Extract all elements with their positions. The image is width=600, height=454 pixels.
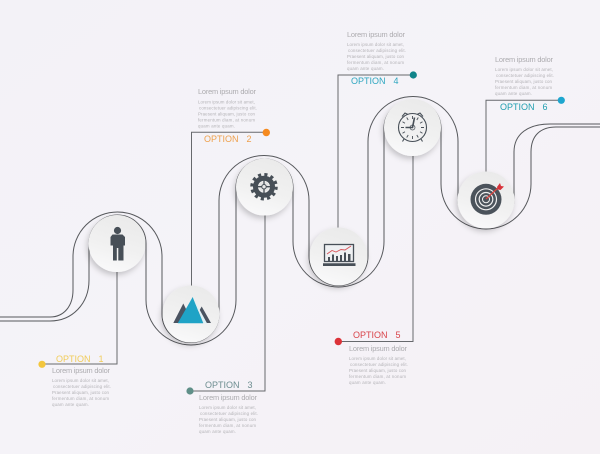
text block: option 1: Lorem ipsum dolor: [52, 366, 111, 375]
icon: laptop chart: [323, 244, 356, 266]
text block: option 6: [495, 55, 554, 96]
text block: option 4: consectetuer adipiscing elit.: [348, 48, 406, 53]
label: option 5: OPTION: [353, 330, 388, 340]
text block: option 5: quam ante quam.: [349, 380, 386, 385]
leader line and dot: option 1: [38, 270, 117, 368]
text block: option 5: [349, 344, 408, 385]
label: option 1: OPTION: [56, 354, 91, 364]
text block: option 3: quam ante quam.: [199, 429, 236, 434]
circle: option 6: [458, 172, 514, 228]
text block: option 2: fermentum diam, at nonum: [198, 118, 255, 122]
text block: option 1: fermentum diam, at nonum: [52, 396, 109, 401]
text block: option 6: quam ante quam.: [495, 91, 532, 96]
circle: option 2: [162, 286, 220, 342]
leader line and dot: option 5: [335, 155, 413, 345]
icon: person: [110, 227, 125, 260]
text block: option 6: consectetuer adipiscing elit.: [496, 73, 554, 78]
text block: option 6: Lorem ipsum dolor: [495, 55, 554, 64]
text block: option 4: fermentum diam, at nonum: [347, 60, 404, 65]
text block: option 5: Lorem ipsum dolor sit amet,: [349, 356, 406, 361]
text block: option 1: [52, 366, 111, 407]
text block: option 2: quam ante quam.: [198, 124, 235, 128]
text block: option 4: Lorem ipsum dolor sit amet,: [347, 42, 404, 47]
icon: target with arrow: [470, 183, 504, 215]
label: option 5: 5: [396, 330, 401, 340]
text block: option 4: [347, 30, 406, 71]
text block: option 2: Lorem ipsum dolor: [198, 87, 257, 96]
text block: option 4: Praesent aliquam, justo con: [347, 54, 405, 59]
label: option 6: OPTION: [500, 102, 535, 112]
panel: option 4: [310, 30, 417, 286]
text block: option 6: fermentum diam, at nonum: [495, 85, 552, 90]
text block: option 1: consectetuer adipiscing elit.: [53, 384, 111, 389]
text block: option 3: consectetuer adipiscing elit.: [200, 411, 258, 416]
icon: alarm clock: [398, 113, 426, 142]
label: option 3: OPTION: [205, 380, 240, 390]
text block: option 2: Praesent aliquam, justo con: [198, 112, 256, 116]
panel: option 6: [458, 55, 565, 228]
text block: option 3: Lorem ipsum dolor: [199, 393, 258, 402]
text block: option 2: consectetuer adipiscing elit.: [199, 106, 257, 110]
label: option 4: 4: [394, 76, 399, 86]
icon: mountains: [173, 297, 211, 323]
text block: option 1: Lorem ipsum dolor sit amet,: [52, 378, 109, 383]
circle: option 1: [88, 215, 146, 272]
panel: option 3: [186, 158, 293, 434]
text block: option 2: Lorem ipsum dolor sit amet,: [198, 100, 255, 104]
icon: gear: [252, 175, 276, 199]
text block: option 5: Lorem ipsum dolor: [349, 344, 408, 353]
text block: option 3: Lorem ipsum dolor sit amet,: [199, 405, 256, 410]
text block: option 4: Lorem ipsum dolor: [347, 30, 406, 39]
leader line and dot: option 4: [338, 71, 417, 228]
text block: option 4: quam ante quam.: [347, 66, 384, 71]
circle: option 5: [384, 99, 441, 156]
circle: option 4: [310, 228, 368, 286]
text block: option 1: quam ante quam.: [52, 402, 89, 407]
text block: option 5: fermentum diam, at nonum: [349, 374, 406, 379]
winding road lines: [0, 96, 600, 345]
text block: option 6: Lorem ipsum dolor sit amet,: [495, 67, 553, 72]
text block: option 5: Praesent aliquam, justo con: [349, 368, 407, 373]
panel: option 5: [335, 99, 441, 385]
leader line and dot: option 6: [486, 97, 565, 172]
panel: option 1: [38, 215, 146, 407]
label: option 1: 1: [98, 354, 104, 364]
text block: option 3: Praesent aliquam, justo con: [199, 417, 257, 422]
text block: option 6: Praesent aliquam, justo con: [495, 79, 553, 84]
text block: option 3: [199, 393, 258, 434]
leader line and dot: option 3: [186, 214, 265, 395]
circle: option 3: [236, 158, 293, 216]
label: option 6: 6: [542, 102, 548, 112]
label: option 4: OPTION: [351, 76, 386, 86]
text block: option 2: [198, 87, 257, 128]
label: option 3: 3: [248, 380, 253, 390]
leader line and dot: option 2: [192, 129, 270, 287]
panel: option 2: [162, 87, 270, 342]
text block: option 3: fermentum diam, at nonum: [199, 423, 256, 428]
text block: option 5: consectetuer adipiscing elit.: [350, 362, 408, 367]
label: option 2: 2: [246, 134, 252, 144]
text block: option 1: Praesent aliquam, justo con: [52, 390, 110, 395]
label: option 2: OPTION: [204, 134, 239, 144]
